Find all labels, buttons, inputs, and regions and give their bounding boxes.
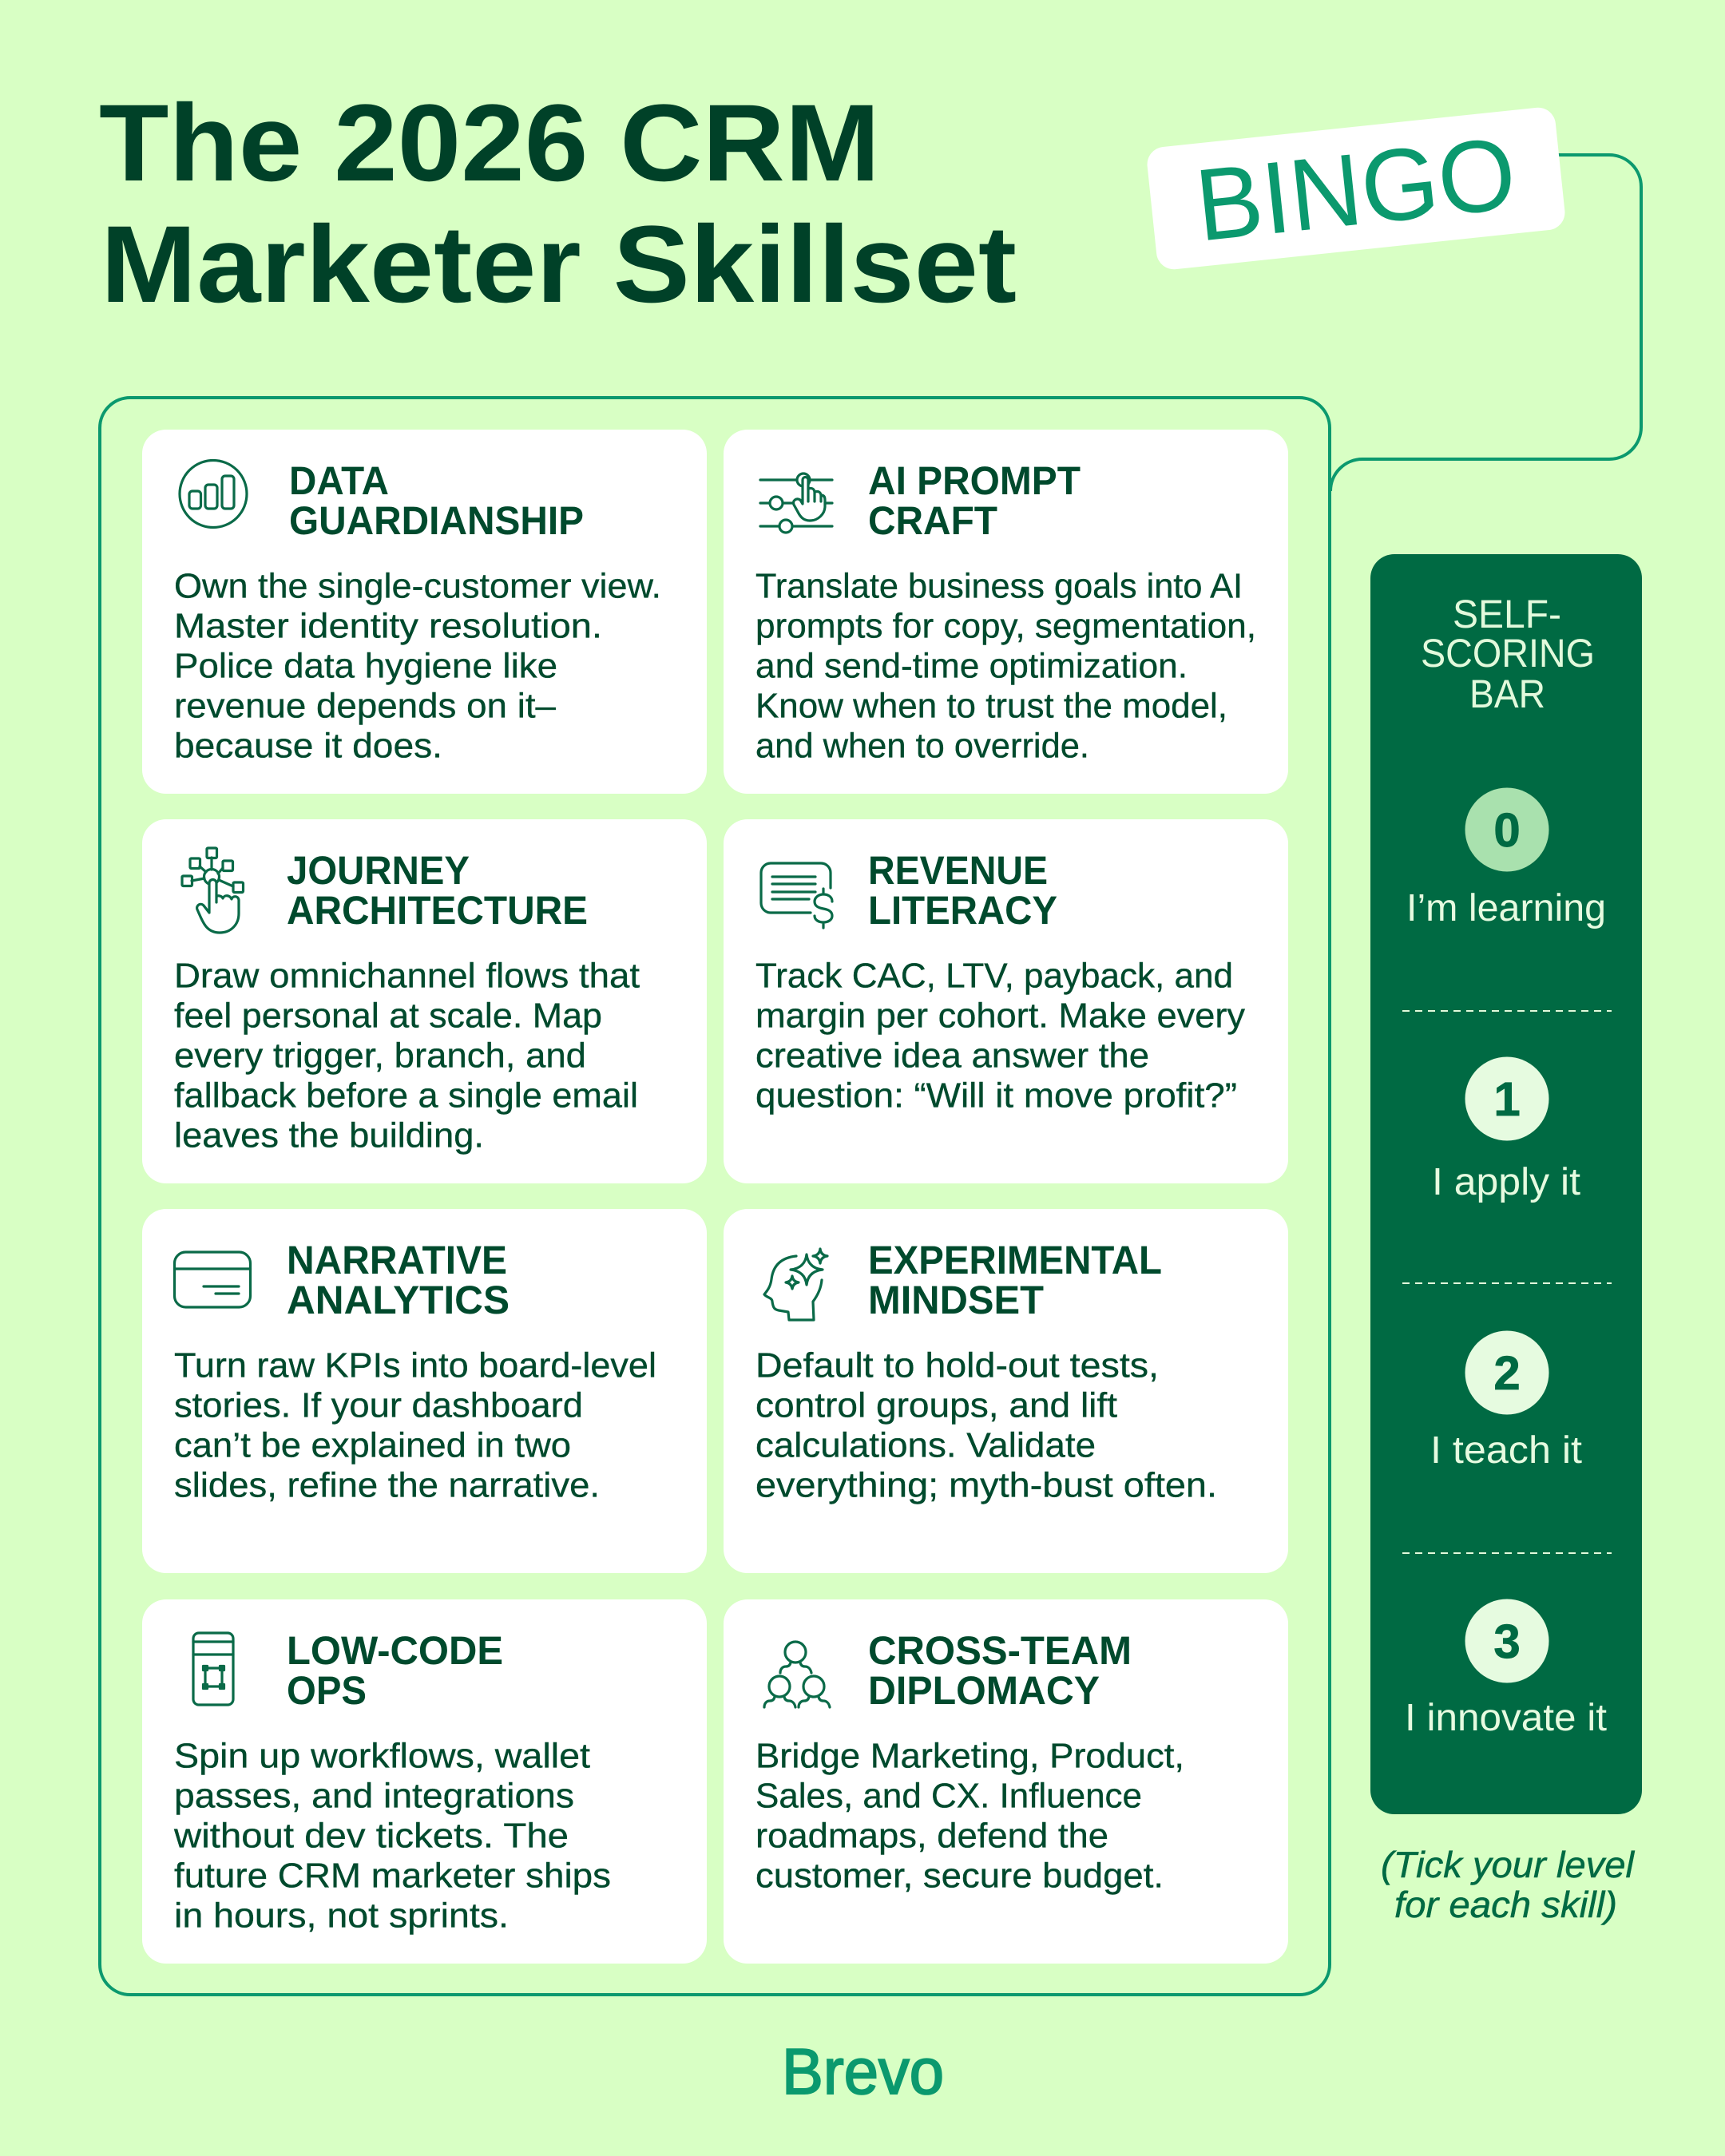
icon: document with dollar	[761, 863, 832, 928]
body text	[755, 1346, 1217, 1504]
heading: AI PROMPT	[868, 458, 1081, 503]
heading: JOURNEY	[287, 848, 470, 893]
body text	[174, 1346, 656, 1504]
level 3: I innovate it	[1405, 1697, 1607, 1739]
body text: without dev tickets. The	[173, 1817, 569, 1856]
body text: leaves the building.	[174, 1116, 484, 1155]
caption	[1381, 1844, 1636, 1925]
heading	[868, 1238, 1162, 1322]
panel: data guardianship	[142, 430, 707, 794]
icon: three people	[764, 1642, 830, 1707]
heading: CROSS-TEAM	[868, 1628, 1132, 1673]
body text: Default to hold-out tests,	[755, 1346, 1159, 1385]
heading: ANALYTICS	[287, 1278, 510, 1322]
heading: OPS	[287, 1668, 367, 1713]
heading	[868, 458, 1081, 543]
panel: cross-team diplomacy	[724, 1599, 1288, 1964]
heading: LITERACY	[868, 888, 1057, 933]
panel: ai prompt craft	[724, 430, 1288, 794]
level 2: 2	[1493, 1346, 1521, 1400]
body text: creative idea answer the	[755, 1036, 1149, 1075]
level 0: I’m learning	[1406, 887, 1606, 929]
heading: EXPERIMENTAL	[868, 1238, 1162, 1282]
heading: DATA	[289, 458, 389, 503]
body text: Draw omnichannel flows that	[174, 957, 640, 995]
caption: for each skill)	[1394, 1884, 1617, 1925]
body text: Know when to trust the model,	[755, 687, 1227, 725]
body text: and send-time optimization.	[755, 647, 1188, 685]
heading: GUARDIANSHIP	[289, 498, 584, 543]
scoring bar heading	[1421, 592, 1595, 716]
body text: future CRM marketer ships	[174, 1857, 611, 1896]
heading	[287, 1628, 503, 1713]
body text	[755, 567, 1256, 765]
body text: fallback before a single email	[174, 1076, 638, 1115]
body text: can’t be explained in two	[174, 1426, 571, 1464]
body text: Translate business goals into AI	[755, 567, 1243, 605]
scoring bar heading: SCORING	[1421, 631, 1595, 676]
level 0	[1406, 787, 1606, 929]
body text: Spin up workflows, wallet	[174, 1738, 590, 1776]
body text: Master identity resolution.	[174, 607, 602, 645]
title: Marketer Skillset	[101, 204, 1017, 326]
heading	[287, 1238, 510, 1322]
panel: self-scoring bar	[1370, 554, 1642, 1814]
body text: margin per cohort. Make every	[755, 997, 1245, 1035]
body text: control groups, and lift	[755, 1386, 1117, 1425]
body text	[755, 957, 1245, 1115]
body text: and when to override.	[755, 727, 1089, 765]
connector line: bingo to frame	[1330, 155, 1641, 491]
body text: Turn raw KPIs into board-level	[174, 1346, 656, 1385]
level 2: I teach it	[1430, 1429, 1582, 1472]
heading: NARRATIVE	[287, 1238, 507, 1282]
scoring bar heading: SELF-	[1453, 592, 1561, 636]
body text: slides, refine the narrative.	[174, 1466, 600, 1504]
body text: question: “Will it move profit?”	[755, 1076, 1237, 1115]
level 0: 0	[1493, 803, 1521, 857]
body text: everything; myth-bust often.	[755, 1466, 1217, 1504]
panel: low-code ops	[142, 1599, 707, 1964]
body text: stories. If your dashboard	[174, 1386, 583, 1425]
level 1	[1432, 1057, 1580, 1203]
body text: roadmaps, defend the	[755, 1817, 1108, 1856]
level 1: I apply it	[1432, 1161, 1580, 1203]
icon: phone with frame	[193, 1633, 233, 1705]
heading: REVENUE	[868, 848, 1048, 893]
logo: Brevo: Brevo	[782, 2036, 944, 2108]
bingo tag: BINGO	[1191, 116, 1521, 264]
icon: network with pointing hand	[182, 848, 243, 933]
body text: Track CAC, LTV, payback, and	[755, 957, 1233, 995]
body text	[174, 567, 661, 765]
body text: Own the single-customer view.	[174, 567, 661, 605]
panel: experimental mindset	[724, 1209, 1288, 1573]
caption: (Tick your level	[1381, 1844, 1636, 1885]
body text: every trigger, branch, and	[174, 1036, 586, 1075]
body text	[174, 957, 640, 1155]
level 3	[1405, 1599, 1607, 1739]
heading: LOW-CODE	[287, 1628, 503, 1673]
icon: head with sparkles	[764, 1249, 827, 1320]
heading: ARCHITECTURE	[287, 888, 588, 933]
heading	[868, 1628, 1132, 1713]
body text	[173, 1738, 611, 1936]
scoring bar heading: BAR	[1469, 672, 1545, 716]
body text: feel personal at scale. Map	[174, 997, 602, 1035]
heading	[289, 458, 584, 543]
level 2	[1430, 1330, 1582, 1472]
heading: MINDSET	[868, 1278, 1044, 1322]
body text: customer, secure budget.	[755, 1857, 1164, 1896]
body text: revenue depends on it–	[174, 687, 557, 725]
panel: revenue literacy	[724, 819, 1288, 1183]
heading	[868, 848, 1057, 933]
title	[99, 82, 1017, 326]
panel: narrative analytics	[142, 1209, 707, 1573]
icon: card	[174, 1252, 251, 1307]
body text: passes, and integrations	[174, 1778, 574, 1816]
heading	[287, 848, 588, 933]
icon: bar chart in circle	[180, 460, 247, 527]
body text: in hours, not sprints.	[174, 1897, 509, 1936]
main frame	[100, 398, 1330, 1995]
body text	[755, 1738, 1184, 1896]
level 1: 1	[1493, 1072, 1521, 1126]
body text: calculations. Validate	[755, 1426, 1096, 1464]
body text: prompts for copy, segmentation,	[755, 607, 1256, 645]
panel: journey architecture	[142, 819, 707, 1183]
title: The 2026 CRM	[99, 82, 880, 204]
heading: CRAFT	[868, 498, 997, 543]
body text: Bridge Marketing, Product,	[755, 1738, 1184, 1776]
body text: Police data hygiene like	[174, 647, 557, 685]
body text: Sales, and CX. Influence	[755, 1778, 1142, 1816]
icon: sliders with pointing hand	[760, 474, 832, 533]
level 3: 3	[1493, 1615, 1521, 1668]
body text: because it does.	[174, 727, 442, 765]
heading: DIPLOMACY	[868, 1668, 1100, 1713]
